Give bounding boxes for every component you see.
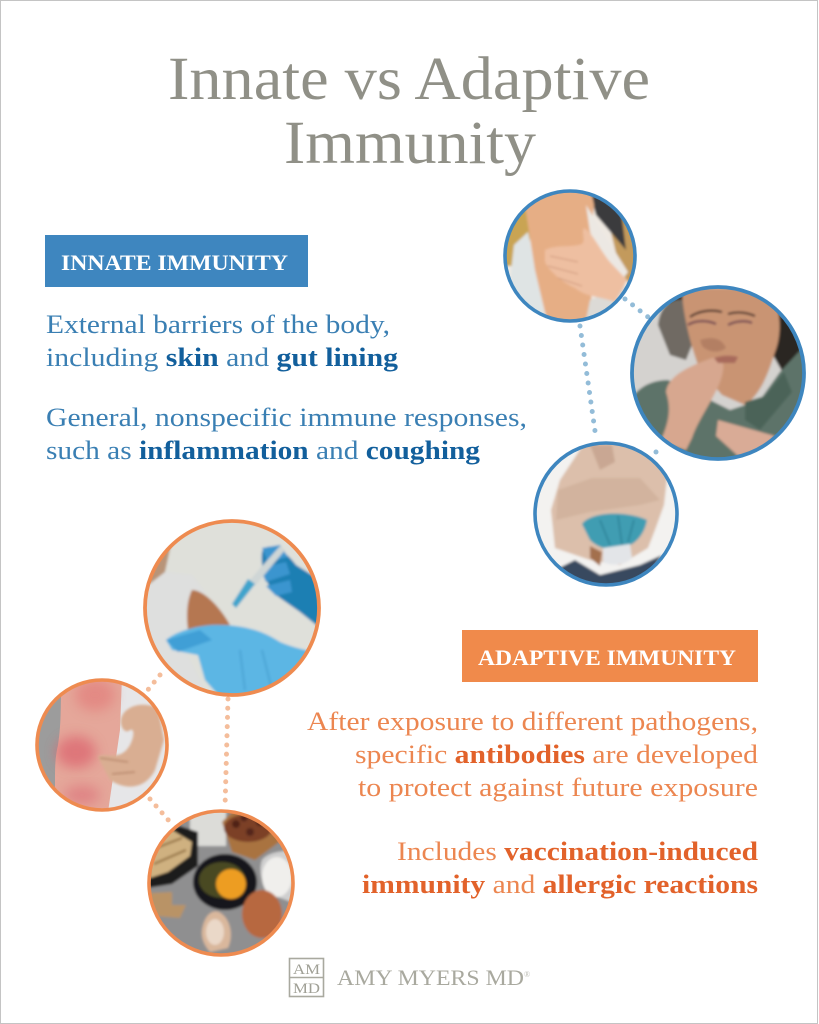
logo: Amy Myers MD: ®: [524, 970, 530, 979]
dotted connectors: orange: [147, 675, 228, 822]
icon: photo vaccination: [142, 518, 322, 698]
text block: external barriers: External barriers of the body,: [46, 309, 390, 339]
dotted connectors: blue: [580, 299, 661, 452]
panel: adaptive immunity text: [307, 630, 758, 899]
text block: nonspecific responses: [46, 402, 527, 465]
text block: antibodies: After exposure to different pathogens,: [307, 706, 758, 736]
icon: photo arm skin: [500, 186, 640, 326]
heading: adaptive immunity: ADAPTIVE IMMUNITY: [478, 645, 736, 670]
title: Innate vs Adaptive: [168, 46, 650, 113]
text block: antibodies: specific antibodies are developed: [355, 739, 758, 769]
icon: photo rash: [34, 676, 174, 816]
text block: external barriers: including skin and gut lining: [46, 342, 398, 372]
logo: Amy Myers MD: [290, 958, 530, 997]
icon: AM MD monogram: MD: [293, 981, 320, 997]
icon: AM MD monogram: [290, 958, 324, 997]
text block: external barriers: [46, 309, 398, 372]
text block: vaccination and allergic: immunity and allergic reactions: [362, 869, 758, 899]
text block: nonspecific responses: General, nonspecific immune responses,: [46, 402, 527, 432]
icon: photo allergen foods: [145, 808, 300, 958]
heading: innate immunity: [45, 235, 308, 287]
wordmark: AMY MYERS MD: [337, 965, 524, 990]
icon: photo ice pack: [530, 440, 682, 590]
heading: adaptive immunity: [462, 630, 758, 682]
panel: innate immunity text: [45, 235, 527, 465]
text block: antibodies: to protect against future exposure: [358, 772, 758, 802]
text block: antibodies: [307, 706, 758, 802]
heading: innate immunity: INNATE IMMUNITY: [61, 250, 288, 275]
title: Immunity: [284, 110, 537, 177]
text block: vaccination and allergic: Includes vaccination-induced: [397, 836, 758, 866]
icon: photo woman coughing: [630, 285, 810, 470]
text block: nonspecific responses: such as inflammation and coughing: [46, 435, 480, 465]
text block: vaccination and allergic: [362, 836, 758, 899]
title: [168, 46, 650, 177]
icon: AM MD monogram: AM: [293, 962, 320, 978]
